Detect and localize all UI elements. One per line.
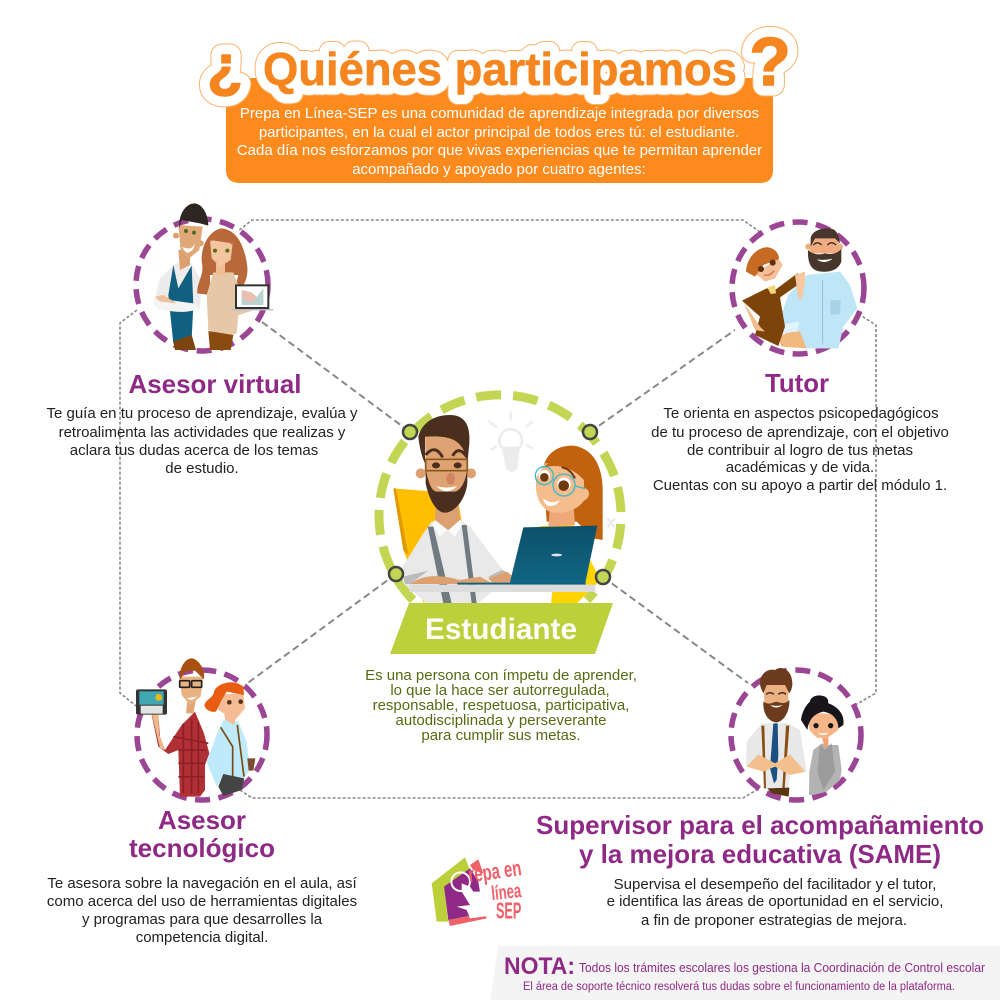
panel: nota <box>490 946 1000 1000</box>
orange intro panel: participantes, en la cual el actor principal de todos eres tú: el estudiante. <box>259 124 739 141</box>
title: ? <box>749 24 791 100</box>
title: ? <box>749 24 791 100</box>
woman with laptop <box>197 228 273 350</box>
text: asesor tecnologico: como acerca del uso de herramientas digitales <box>47 893 357 910</box>
panel: asesor virtual illustration <box>136 203 273 351</box>
title: Quiénes participamos <box>263 43 737 95</box>
heading: asesor tecnologico <box>129 805 275 863</box>
text: tutor: Cuentas con su apoyo a partir del módulo 1. <box>653 477 947 494</box>
student description: responsable, respetuosa, participativa, <box>373 697 629 714</box>
title: Quiénes participamos <box>263 43 737 95</box>
dashed connectors to student <box>245 322 748 685</box>
heading: asesor tecnologico: tecnológico <box>129 833 275 863</box>
woman <box>527 446 603 603</box>
text: asesor tecnologico: Te asesora sobre la navegación en el aula, así <box>47 875 358 892</box>
icon: light bulb <box>488 412 615 527</box>
text: asesor virtual <box>46 405 358 477</box>
title: ¿ <box>207 34 243 99</box>
man in vest <box>153 203 208 350</box>
heading: asesor virtual: Asesor virtual <box>128 369 302 399</box>
man <box>402 415 513 603</box>
logo: Prepa en Línea SEP: SEP <box>496 897 521 923</box>
heading: SAME <box>536 810 984 869</box>
yellow chair <box>393 488 475 603</box>
panel: SAME illustration <box>731 668 861 800</box>
text: tutor: de tu proceso de aprendizaje, con el objetivo <box>651 424 949 441</box>
panel: nota: Todos los trámites escolares los gestiona la Coordinación de Control escolar <box>579 961 985 975</box>
heading: tutor: Tutor <box>765 368 829 398</box>
man in red plaid with tablet <box>136 658 209 797</box>
heading: SAME: y la mejora educativa (SAME) <box>579 839 941 869</box>
text: tutor: de contribuir al logro de tus metas <box>687 442 913 459</box>
text: asesor tecnologico: competencia digital. <box>136 929 268 946</box>
heading: asesor tecnologico: Asesor <box>158 805 246 835</box>
text: SAME: e identifica las áreas de oportunidad en el servicio, <box>607 893 943 910</box>
text: tutor <box>651 405 949 494</box>
Estudiante banner <box>390 603 613 654</box>
student description: lo que la hace ser autorregulada, <box>390 682 610 699</box>
red haired woman <box>742 247 805 346</box>
student description: Es una persona con ímpetu de aprender, <box>365 667 637 684</box>
logo: Prepa en Línea SEP <box>432 855 523 926</box>
student description: para cumplir sus metas. <box>421 727 581 744</box>
orange intro panel: Prepa en Línea-SEP es una comunidad de aprendizaje integrada por diversos <box>240 105 759 122</box>
heading: SAME: Supervisor para el acompañamiento <box>536 810 984 840</box>
connector nodes <box>389 425 610 584</box>
text: asesor virtual: aclara tus dudas acerca de los temas <box>70 442 318 459</box>
woman with coffee <box>204 682 255 796</box>
orange intro panel: Cada día nos esforzamos por que vivas experiencias que te permitan aprender <box>237 142 762 159</box>
bearded man <box>778 228 857 348</box>
panel: tutor illustration <box>732 222 864 354</box>
text: tutor: Te orienta en aspectos psicopedagógicos <box>663 405 939 422</box>
text: asesor tecnologico <box>47 875 358 946</box>
laptop <box>457 526 597 585</box>
title: ? <box>749 24 791 100</box>
text: tutor: académicas y de vida. <box>726 459 874 476</box>
text: asesor virtual: Te guía en tu proceso de aprendizaje, evalúa y <box>46 405 358 422</box>
table <box>409 585 595 592</box>
bearded man with tie <box>746 668 807 797</box>
title <box>207 24 791 100</box>
woman with black bun <box>801 695 844 795</box>
orange intro panel: acompañado y apoyado por cuatro agentes: <box>352 161 646 178</box>
orange intro panel <box>226 78 773 183</box>
dotted outer connector <box>120 220 876 798</box>
panel: nota: NOTA: <box>504 953 575 980</box>
text: SAME: a fin de proponer estrategias de mejora. <box>641 912 907 929</box>
student illustration <box>379 395 621 603</box>
text: SAME <box>607 876 943 929</box>
title: ¿ <box>207 34 243 99</box>
title: Quiénes participamos <box>263 43 737 95</box>
text: asesor tecnologico: y programas para que desarrolles la <box>82 911 323 928</box>
panel: nota: El área de soporte técnico resolverá tus dudas sobre el funcionamiento de la plataforma. <box>523 981 955 993</box>
text: asesor virtual: retroalimenta las actividades que realizas y <box>59 424 346 441</box>
student description <box>365 667 637 744</box>
logo: Prepa en Línea SEP: repa en <box>467 855 523 887</box>
text: asesor virtual: de estudio. <box>165 460 239 477</box>
text: SAME: Supervisa el desempeño del facilitador y el tutor, <box>614 876 936 893</box>
student description: autodisciplinada y perseverante <box>396 712 606 729</box>
Estudiante banner: Estudiante <box>425 613 577 646</box>
title: ¿ <box>207 34 243 99</box>
panel: asesor tecnologico illustration <box>136 658 267 800</box>
lime dashed ring <box>379 395 621 600</box>
logo: Prepa en Línea SEP: línea <box>490 880 523 905</box>
